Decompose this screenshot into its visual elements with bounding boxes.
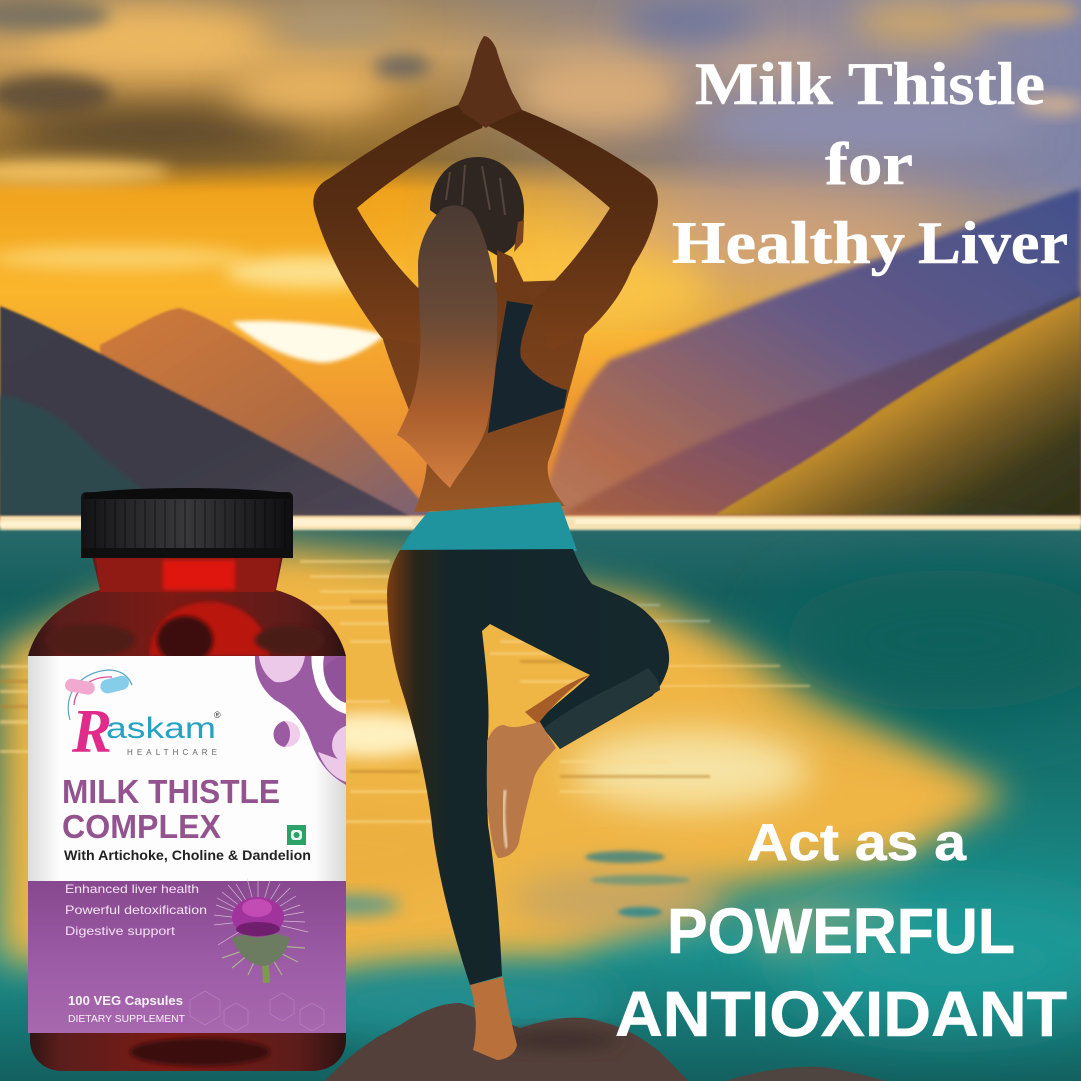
sports bra [488, 301, 567, 433]
label [28, 656, 374, 1033]
brand logo: ® [214, 710, 221, 720]
callout: Act as a powerful antioxidant: ANTIOXIDANT [615, 978, 1067, 1050]
leggings [387, 549, 669, 985]
head [430, 157, 524, 256]
callout: Act as a powerful antioxidant [615, 814, 1067, 1050]
woman doing tree pose [313, 36, 669, 1060]
callout: Act as a powerful antioxidant: Act as a [747, 814, 967, 872]
heading: Milk Thistle for Healthy Liver: Liver [918, 210, 1068, 276]
heading: Milk Thistle for Healthy Liver: Thistle [848, 51, 1045, 117]
benefits list: Digestive support [65, 924, 176, 938]
benefits list: Enhanced liver health [65, 882, 199, 896]
neck [497, 250, 533, 304]
brand logo: askam [106, 712, 216, 745]
heading: Milk Thistle for Healthy Liver [672, 51, 1068, 276]
hexagon pattern [190, 991, 324, 1031]
right arm [484, 104, 658, 350]
rocks [325, 1003, 885, 1081]
heading: Milk Thistle for Healthy Liver: Milk [695, 51, 834, 117]
glass highlight [163, 560, 235, 590]
thistle flower [214, 878, 308, 983]
benefits list [65, 882, 207, 938]
product name: MILK THISTLE [62, 773, 280, 810]
product name: COMPLEX [62, 808, 221, 845]
lake [0, 516, 1081, 1081]
pack size: 100 VEG Capsules [68, 993, 183, 1008]
shin skin [525, 675, 590, 724]
mountains [0, 188, 1081, 516]
product bottle [28, 488, 374, 1071]
pack size [68, 993, 186, 1025]
heading: Milk Thistle for Healthy Liver: Healthy [672, 210, 905, 276]
brand logo [64, 670, 221, 766]
benefits list: Powerful detoxification [65, 903, 207, 917]
waistband [400, 502, 577, 551]
torso [382, 280, 585, 512]
brand logo: HEALTHCARE [127, 748, 217, 757]
clouds [0, 0, 1081, 363]
ponytail [397, 205, 497, 488]
neck shading [96, 558, 280, 592]
capsules [45, 602, 325, 664]
product name [62, 773, 280, 845]
raised foot [487, 722, 556, 858]
label decorative blobs [254, 656, 346, 785]
left arm [313, 105, 488, 345]
calf highlight [544, 668, 660, 749]
heading: Milk Thistle for Healthy Liver: for [825, 131, 913, 197]
cap [81, 488, 293, 558]
bottle glass [28, 556, 346, 1071]
veg mark [287, 825, 306, 845]
standing ankle [470, 977, 517, 1060]
ear [514, 220, 524, 252]
hands [458, 36, 522, 128]
pack size: DIETARY SUPPLEMENT [68, 1013, 186, 1025]
subtitle: With Artichoke, Choline & Dandelion [64, 848, 311, 863]
brand logo: R [71, 698, 112, 766]
callout: Act as a powerful antioxidant: POWERFUL [667, 895, 1015, 967]
